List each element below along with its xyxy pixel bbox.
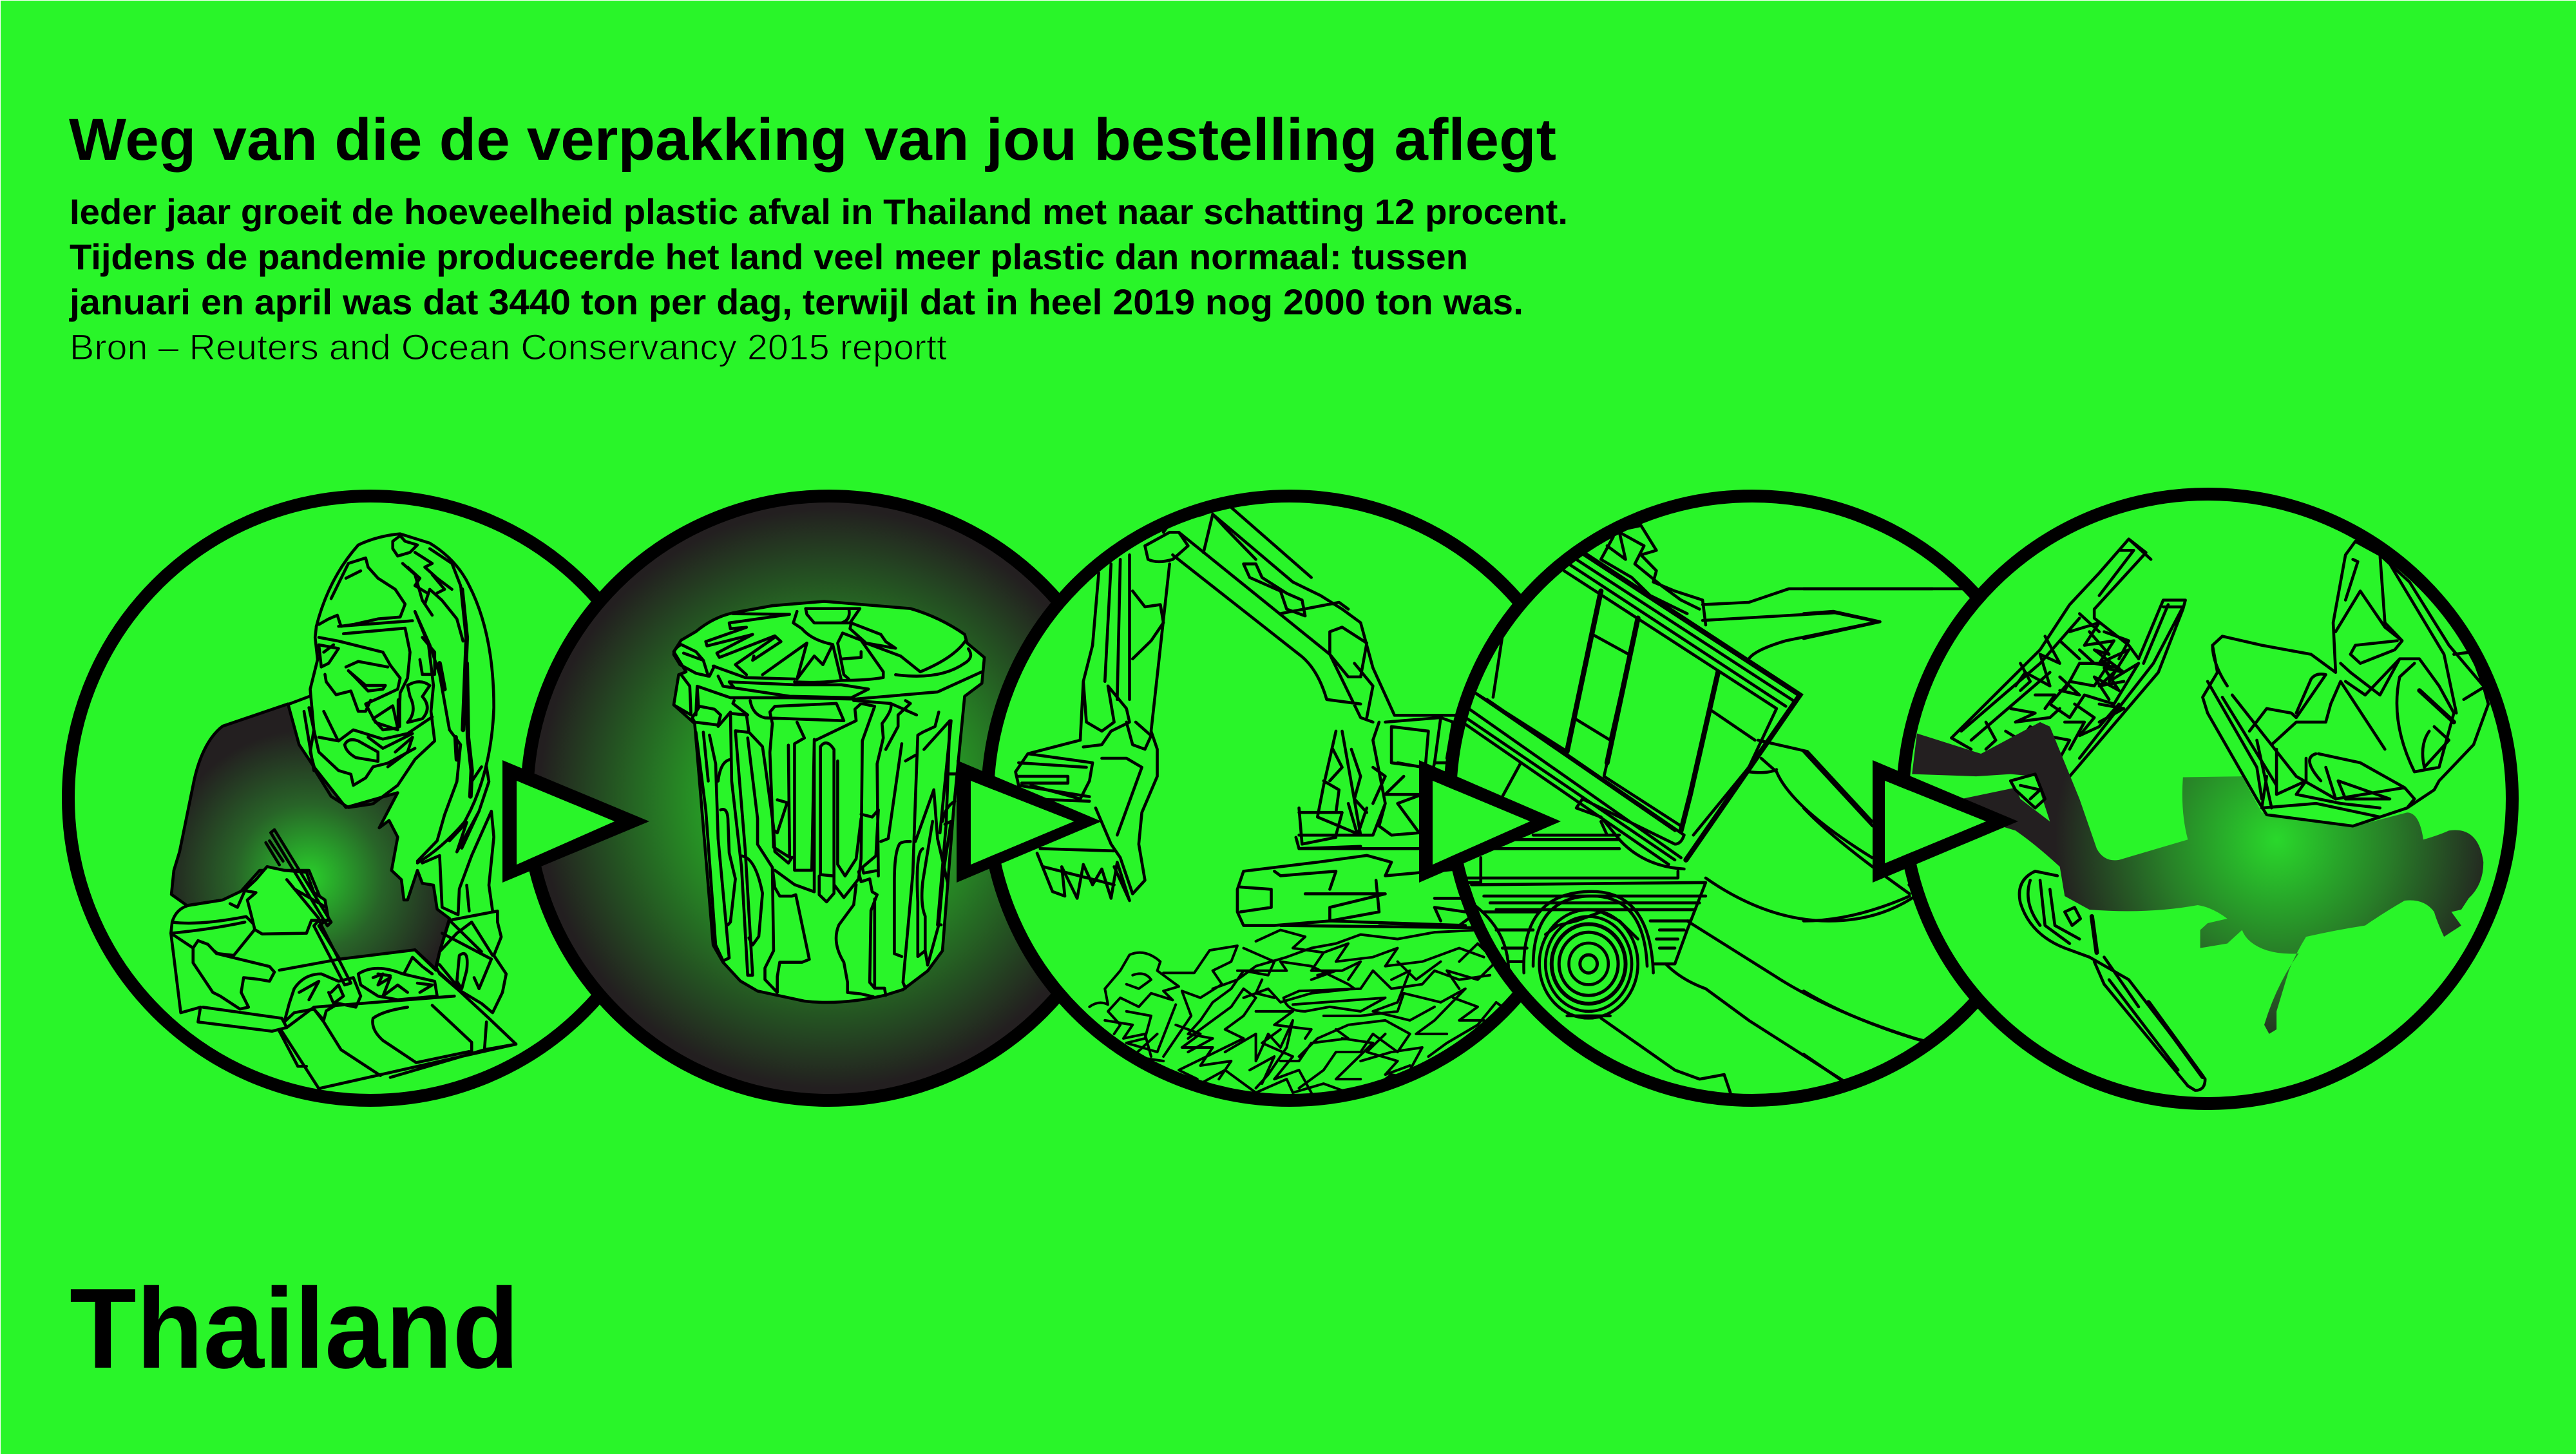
panel: excavator on waste pile [987, 496, 1592, 1100]
can silhouette [674, 601, 984, 1002]
shirt silhouette [171, 704, 450, 970]
head and hair [316, 534, 494, 863]
arrow 2 [957, 760, 1102, 883]
circle outline [1903, 494, 2512, 1104]
bottle outline [1951, 539, 2186, 776]
title: Weg van die de verpakking van jou bestelling aflegt [69, 107, 1556, 173]
landscape lines right [1804, 589, 1966, 1082]
arm and bucket [1016, 555, 1170, 901]
undercarriage [1237, 856, 1478, 928]
circle outline [987, 496, 1592, 1100]
circle outline [1450, 496, 2054, 1100]
wheel [1524, 892, 1654, 973]
bottle cap between legs [2010, 774, 2045, 808]
panel: dump truck [1450, 496, 2054, 1100]
utensil [2019, 871, 2205, 1091]
heading block [69, 107, 1568, 367]
panel: person unpacking an order [68, 496, 673, 1100]
boom and cab [1143, 508, 1456, 850]
chassis [1465, 821, 1706, 971]
landscape lines [1502, 589, 1932, 1093]
load spilling from bed [1601, 526, 1706, 625]
arm and hand [171, 866, 329, 955]
circle outline [527, 496, 1131, 1100]
arrow 1 [502, 760, 649, 883]
panel: diver and ocean plastic [1903, 494, 2512, 1104]
circle outline [68, 496, 673, 1100]
line work: arm, desk and book [171, 891, 256, 1013]
body folds [696, 700, 844, 993]
intro line 3: januari en april was dat 3440 ton per dag, terwijl dat in heel 2019 nog 2000 ton was. [69, 282, 1523, 322]
drawing on paper [284, 957, 437, 1022]
illustration: excavator [1016, 508, 1509, 1093]
right hand [436, 911, 506, 1013]
diver silhouette [1912, 722, 2483, 1034]
panel: trash can [527, 496, 1131, 1100]
lid lines [674, 609, 982, 725]
dump bed [1567, 553, 1800, 860]
arrow 4 [1873, 760, 2018, 883]
country label: Thailand [70, 1265, 519, 1392]
bottle texture [1986, 614, 2139, 758]
illustration: person writing [171, 534, 516, 1089]
illustration: tipping truck [1462, 526, 1966, 1093]
source line: Bron – Reuters and Ocean Conservancy 2015 reportt [70, 327, 947, 367]
waste pile [1089, 930, 1509, 1093]
illustration: trash can [674, 601, 984, 1002]
pen [266, 830, 351, 985]
arrow 3 [1419, 760, 1561, 883]
intro line 1: Ieder jaar groeit de hoeveelheid plastic afval in Thailand met naar schatting 12 procent. [70, 191, 1568, 232]
intro line 2: Tijdens de pandemie produceerde het land veel meer plastic dan normaal: tussen [70, 236, 1468, 277]
plastic bag [2202, 541, 2488, 826]
illustration: diver with plastic [1912, 539, 2488, 1091]
